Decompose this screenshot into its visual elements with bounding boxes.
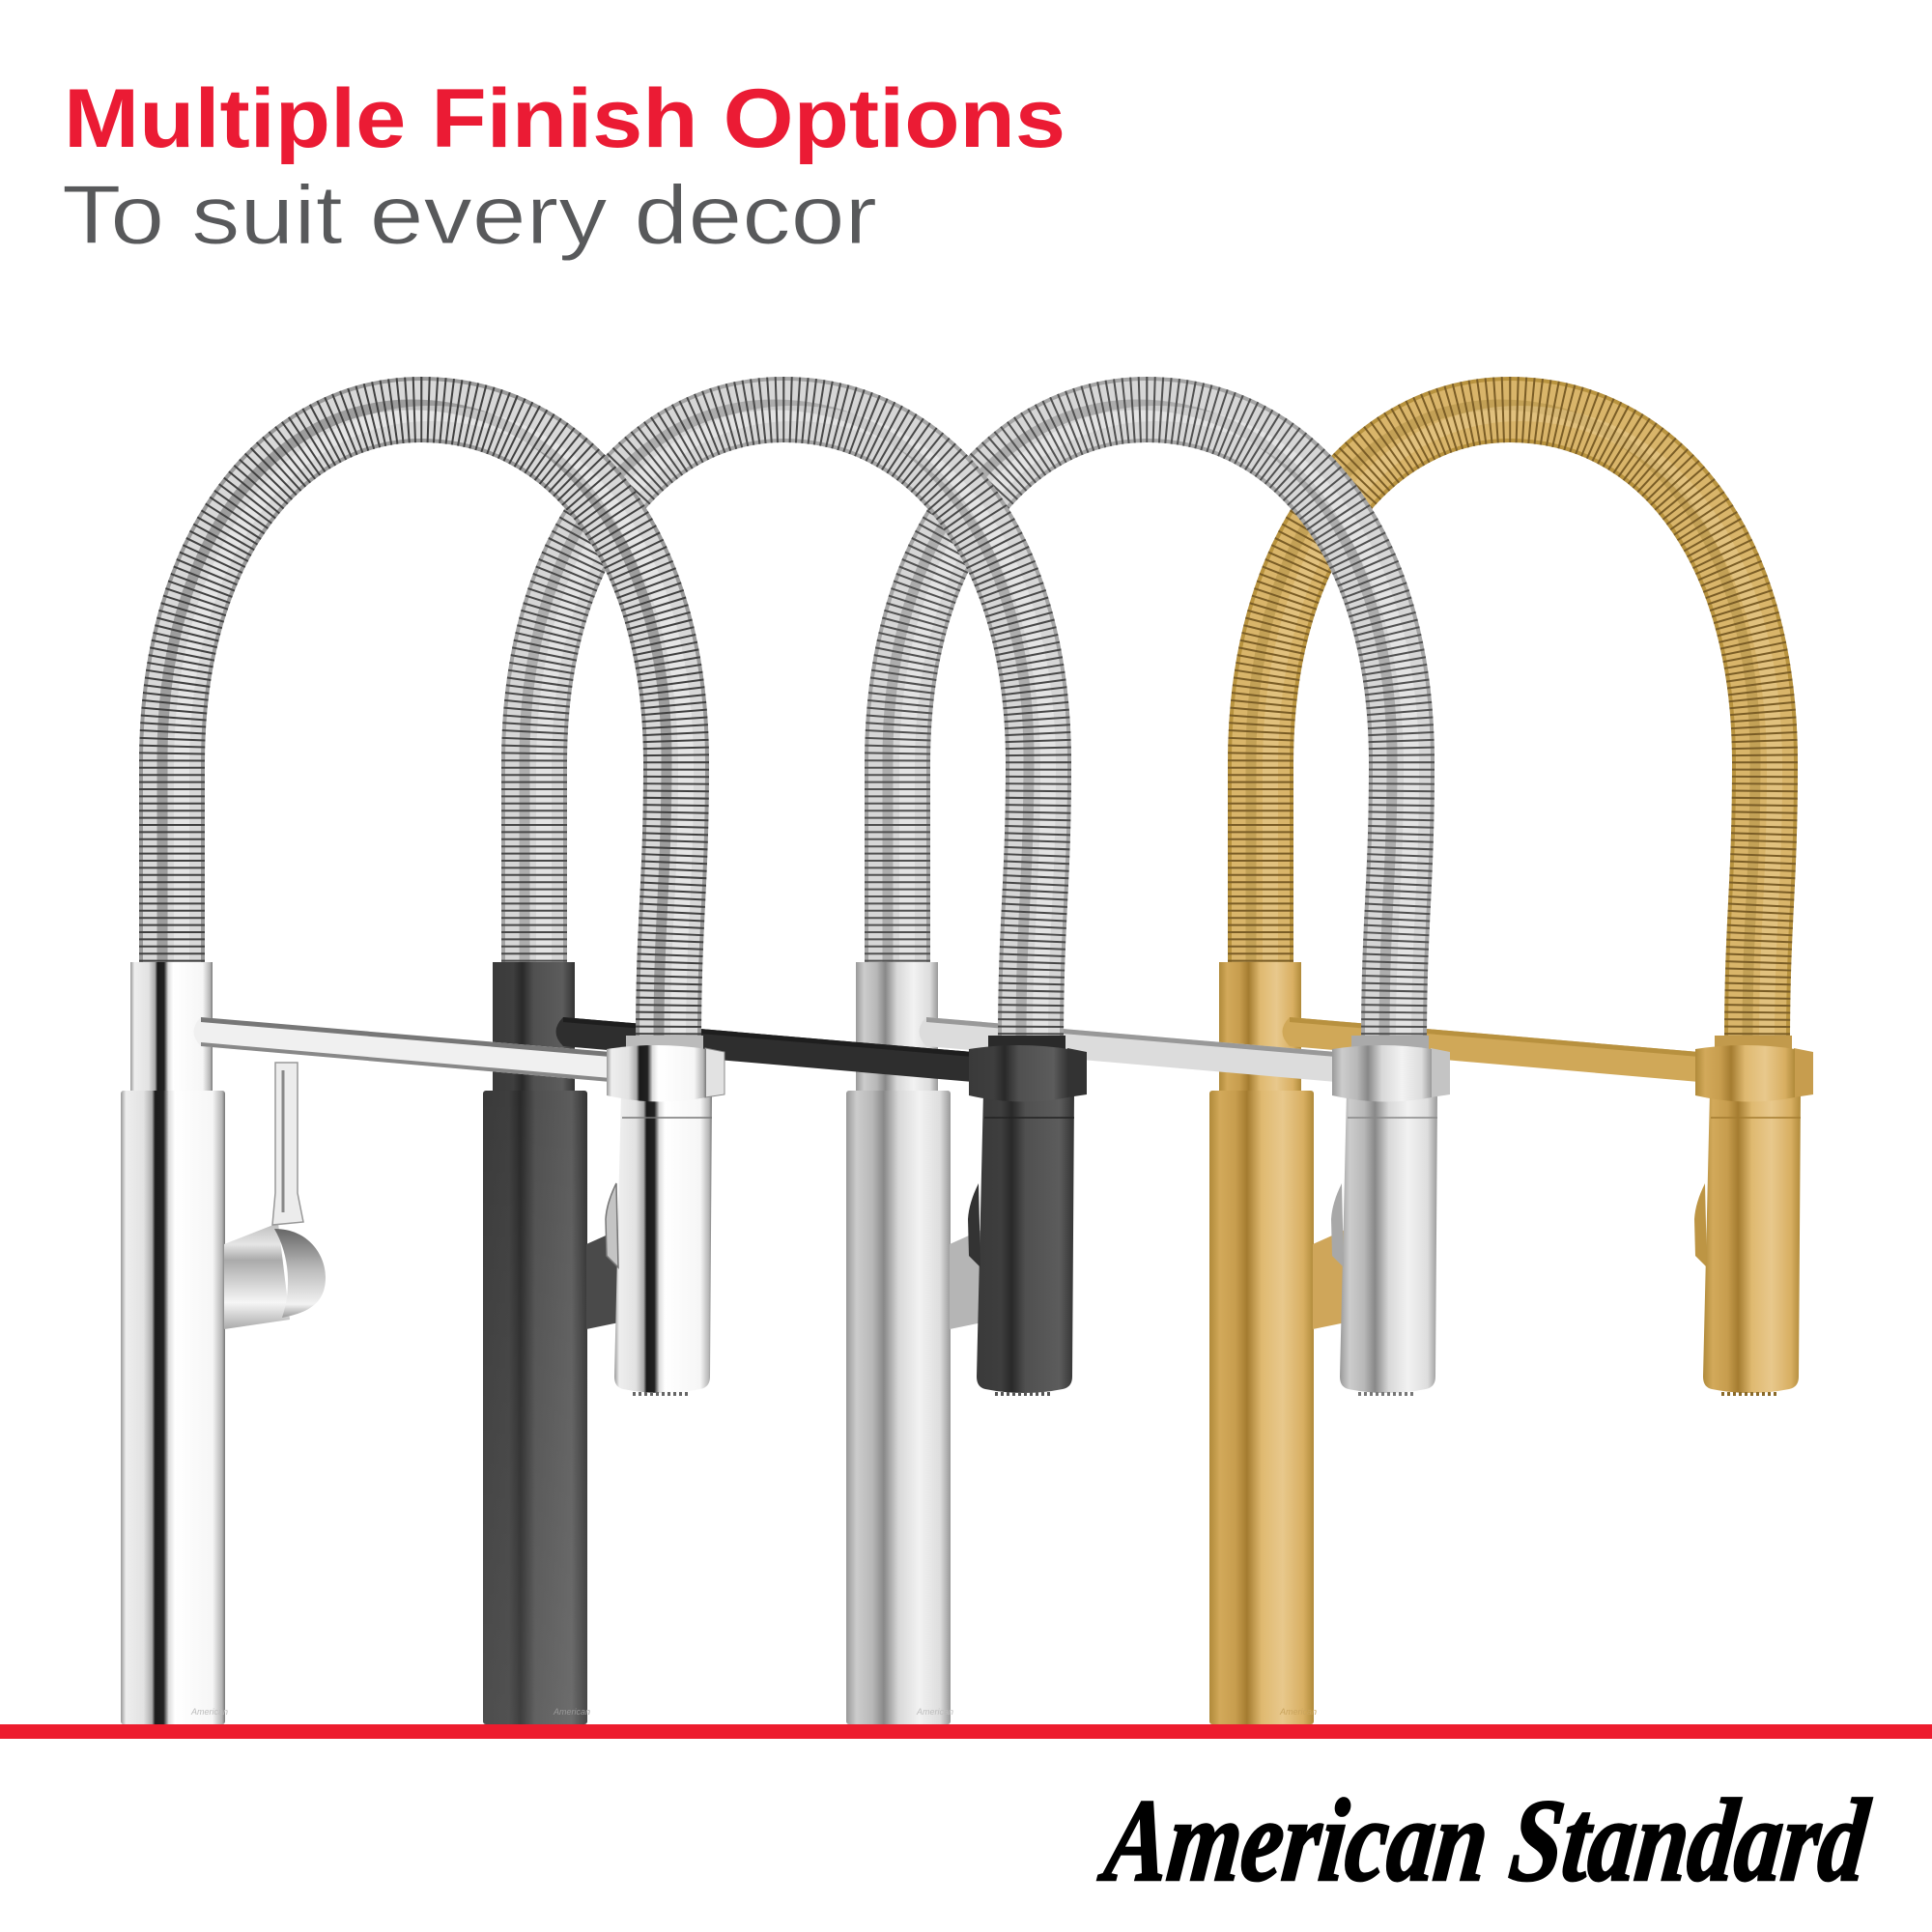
gold column: American: [1279, 1707, 1317, 1717]
gold bar: [1283, 1017, 1699, 1082]
nickel bar: [920, 1017, 1336, 1082]
black column: [483, 962, 590, 1724]
subtitle: To suit every decor: [62, 169, 877, 262]
gold hose: [1251, 405, 1775, 1049]
title: Multiple Finish Options: [64, 72, 1065, 165]
nickel spray head: [1331, 1036, 1450, 1394]
faucet: brushed nickel finish: [846, 405, 1450, 1724]
chrome column: American: [190, 1707, 228, 1717]
gold handle: [1313, 1063, 1414, 1329]
black finish hose: [525, 405, 1048, 1049]
gold spray head: [1694, 1036, 1813, 1394]
black handle: [586, 1063, 688, 1329]
nickel hose: [888, 405, 1411, 1049]
gold column: [1209, 962, 1317, 1724]
chrome handle: [224, 1063, 326, 1329]
chrome spray head: [606, 1036, 724, 1394]
red divider line: [0, 1724, 1932, 1739]
faucet: gold finish: [1209, 405, 1813, 1724]
faucet: matte black finish: [483, 405, 1087, 1724]
chrome column: [121, 962, 228, 1724]
nickel column: [846, 962, 953, 1724]
chrome hose: [162, 405, 686, 1049]
nickel column: American: [916, 1707, 953, 1717]
black column: American: [553, 1707, 590, 1717]
chrome bar: [193, 1017, 611, 1082]
black spray head: [968, 1036, 1087, 1394]
nickel handle: [950, 1063, 1051, 1329]
black bar: [556, 1017, 973, 1082]
faucet: polished chrome finish: [121, 405, 724, 1724]
